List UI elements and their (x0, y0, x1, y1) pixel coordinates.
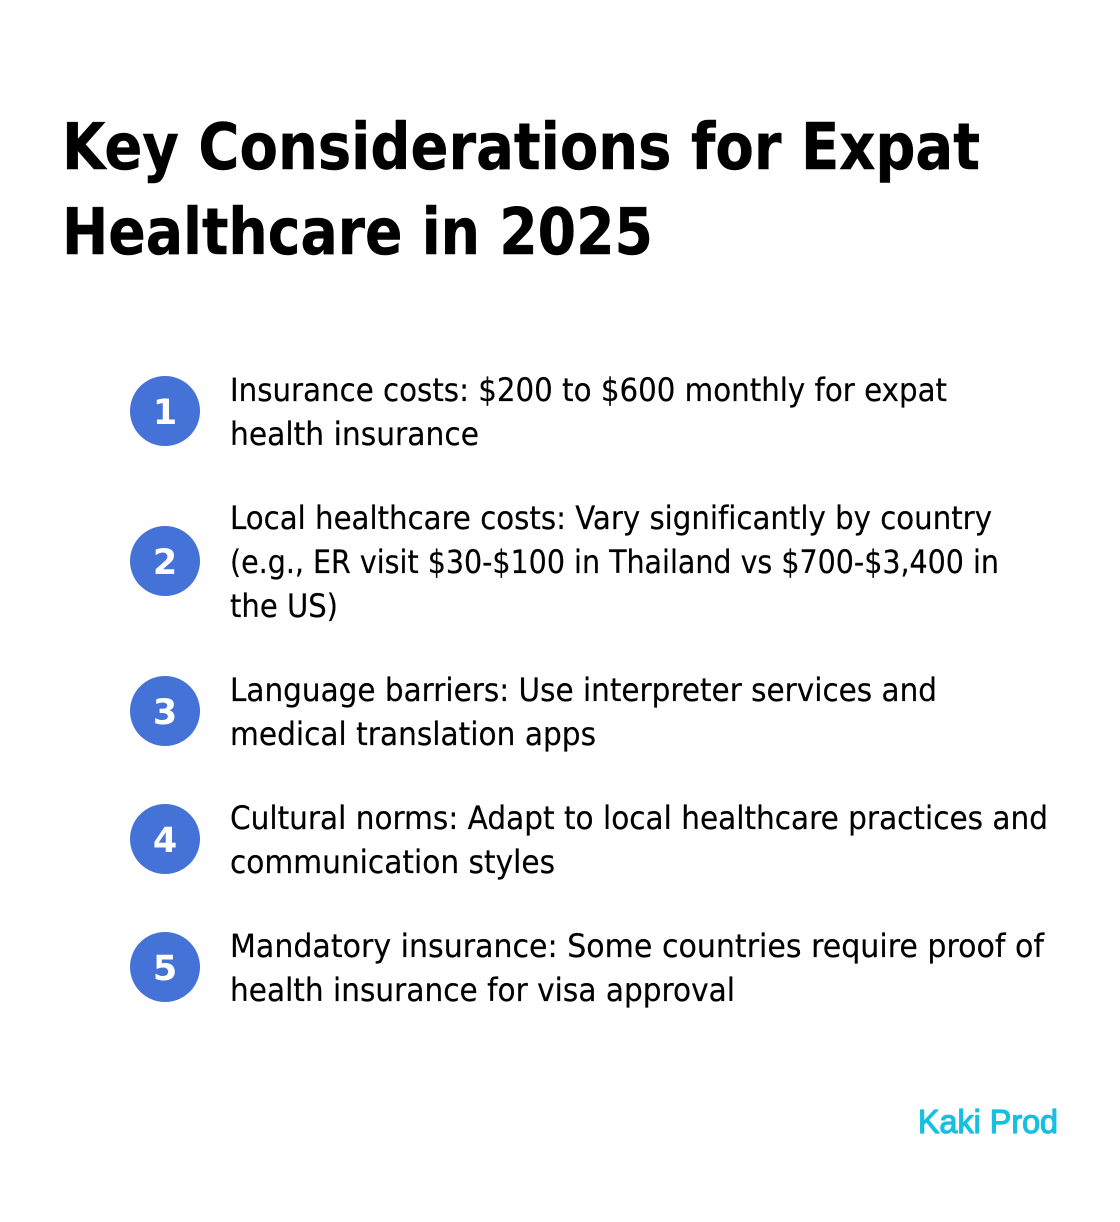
list item 3: language barriers (130, 671, 937, 753)
list item 1: insurance costs (130, 371, 947, 453)
list item 4: cultural norms (130, 799, 1048, 881)
list item 5: mandatory insurance (130, 927, 1045, 1009)
item 3 text: medical translation apps (230, 715, 596, 753)
item 1 text: health insurance (230, 415, 479, 453)
item 1 text: Insurance costs: $200 to $600 monthly for expat (230, 371, 947, 409)
item 5 text: Mandatory insurance: Some countries require proof of (230, 927, 1045, 965)
item 4 text: Cultural norms: Adapt to local healthcare practices and (230, 799, 1048, 837)
item 5 text (230, 927, 1045, 1009)
list item 2: local healthcare costs (130, 499, 999, 625)
item 2 text: Local healthcare costs: Vary significantly by country (230, 499, 992, 537)
item 5 text: health insurance for visa approval (230, 971, 735, 1009)
number badge 1 (130, 376, 200, 446)
number badge 5: 5 (153, 949, 177, 989)
item 2 text: the US) (230, 587, 338, 625)
number badge 1: 1 (153, 393, 177, 433)
number badge 5 (130, 932, 200, 1002)
title: Healthcare in 2025 (62, 196, 653, 270)
number badge 2 (130, 526, 200, 596)
number badge 4 (130, 804, 200, 874)
item 1 text (230, 371, 947, 453)
item 3 text (230, 671, 937, 753)
item 2 text (230, 499, 999, 625)
title (62, 111, 980, 270)
logo: Kaki Prod: Kaki Prod (918, 1103, 1058, 1140)
item 2 text: (e.g., ER visit $30-$100 in Thailand vs $700-$3,400 in (230, 543, 999, 581)
number badge 3: 3 (153, 693, 177, 733)
number badge 3 (130, 676, 200, 746)
number badge 2: 2 (153, 543, 177, 583)
item 4 text (230, 799, 1048, 881)
title: Key Considerations for Expat (62, 111, 980, 185)
number badge 4: 4 (153, 821, 177, 861)
item 4 text: communication styles (230, 843, 555, 881)
item 3 text: Language barriers: Use interpreter services and (230, 671, 937, 709)
